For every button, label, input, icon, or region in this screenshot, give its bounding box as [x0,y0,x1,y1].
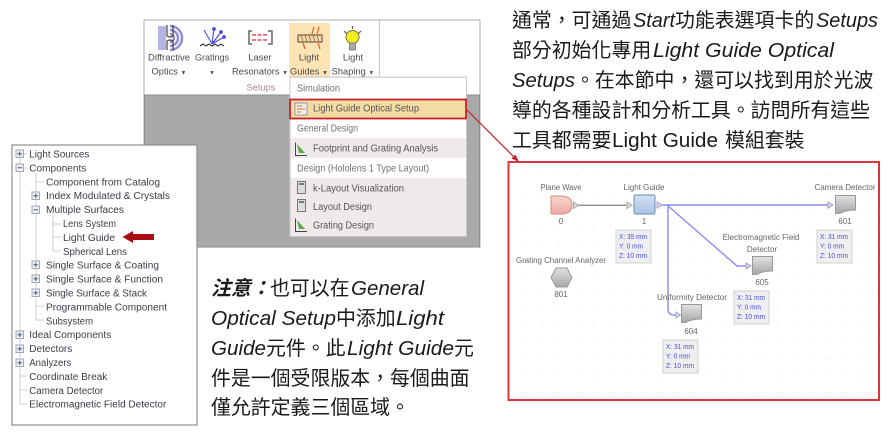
text block: note: 注意： [211,277,271,300]
node: grating channel analyzer: Grating Channel Analyzer [516,256,606,265]
text block: note: 僅允許定義三個區域。 [211,396,410,419]
node: light guide [616,183,665,263]
dropdown menu: General Design [297,124,358,134]
info box: X: 35 mm [619,234,647,241]
panel: component tree: Camera Detector [29,386,104,397]
panel: optical setup diagram [508,162,879,400]
ribbon button labels: Setups [247,82,276,92]
node: uniformity detector [657,293,727,373]
text block: intro paragraph: 通常，可通過 [512,9,631,32]
dropdown menu [290,77,466,236]
panel: component tree: Single Surface & Function [46,275,163,286]
dropdown menu: Design (Hololens 1 Type Layout) [297,164,429,174]
panel: component tree: Light Sources [29,150,89,160]
panel: component tree: Index Modulated & Crystals [46,191,170,202]
highlighted menu item [290,100,466,118]
text block: intro paragraph: 導的各種設計和分析工具。訪問所有這些 [512,99,870,122]
node: grating channel analyzer: 801 [554,290,568,299]
ribbon button labels: Diffractive [148,52,190,62]
panel: component tree: Single Surface & Stack [46,288,148,300]
node: light guide: 1 [642,217,647,226]
text block: intro paragraph: 功能表選項卡的 [675,9,814,32]
text block: intro paragraph: 工具都需要 [512,129,611,152]
panel: component tree: Single Surface & Coating [46,261,159,272]
text block: intro paragraph: Setups [512,70,575,92]
text block: note: Light Guide [347,338,454,360]
ribbon button labels: Gratings [195,52,229,62]
info box: Z: 10 mm [737,314,765,321]
panel: component tree: Spherical Lens [63,247,127,258]
ribbon button labels: Optics ▼ [152,66,186,76]
ribbon button labels: Guides ▼ [290,66,328,76]
node: plane wave [540,183,582,226]
info box: X: 31 mm [666,344,694,351]
icon: gratings [200,28,225,46]
arrow: points to Light Guide [122,231,154,243]
dropdown menu: k-Layout Visualization [313,184,404,194]
dropdown menu: Layout Design [313,202,372,213]
info box: X: 31 mm [737,295,765,302]
text block: intro paragraph: 部分初始化專用 [512,39,651,62]
info box [734,291,769,324]
text block: intro paragraph: 模組套裝 [725,129,805,152]
ribbon button labels: Laser [248,52,272,62]
node: uniformity detector: 604 [684,327,698,336]
text block: note: 也可以在 [270,277,350,300]
icon: light bulb [344,26,361,50]
dropdown menu: Footprint and Grating Analysis [313,144,438,154]
panel: component tree: Subsystem [46,316,93,327]
info box: Z: 10 mm [666,363,694,370]
icon: diffractive optics [158,25,182,50]
panel: component tree: Analyzers [29,358,71,369]
text block: note: Optical Setup [211,308,336,330]
panel: component tree: Electromagnetic Field Detector [29,400,167,411]
info box: Z: 10 mm [820,253,848,260]
text block: intro paragraph: Setups [816,10,878,32]
info box [817,230,852,263]
panel: component tree: Component from Catalog [46,177,160,188]
ribbon button labels: Resonators ▼ [232,66,288,76]
info box: Z: 10 mm [619,253,647,260]
text block: note: Light [396,308,446,330]
node: camera detector [814,183,876,263]
text block: note: Guide [211,338,266,360]
node: light guide: Light Guide [624,183,665,192]
node: electromagnetic field detector: Detector [747,245,777,254]
node: plane wave: 0 [559,217,564,226]
text block: note: General [351,278,425,300]
info box: Y: 0 mm [619,244,643,250]
text block: note: 元 [454,338,474,360]
tree expanders [16,150,40,366]
text block: note [211,277,474,419]
panel: component tree: Ideal Components [29,330,111,341]
text block: intro paragraph: Start [633,10,676,32]
info box: Y: 0 mm [737,304,761,312]
dropdown menu: Grating Design [313,220,374,232]
ribbon button labels: Shaping ▼ [332,66,374,76]
info box: Y: 0 mm [666,354,690,360]
panel: component tree: Coordinate Break [29,372,108,383]
info box: X: 31 mm [820,234,848,241]
panel: component tree: Detectors [29,344,72,355]
text block: intro paragraph: Light Guide [612,130,718,152]
ribbon button labels: ▼ [209,70,215,76]
node: grating channel analyzer [516,256,606,299]
ribbon button labels: Light [299,52,319,62]
node: camera detector: 601 [838,217,852,226]
panel: component tree: Lens System [63,219,116,230]
node: electromagnetic field detector: Electromagnetic Field [722,233,800,242]
node: electromagnetic field detector [722,233,800,324]
panel: component tree [12,145,197,425]
info box: Y: 0 mm [820,244,844,250]
ribbon button labels: Light [343,52,363,62]
panel: component tree: Multiple Surfaces [46,205,124,216]
info box [663,340,698,373]
text block: intro paragraph: Light Guide Optical [653,40,835,62]
panel: component tree: Light Guide [63,233,115,244]
text block: note: 元件。此 [266,337,346,360]
icon: light guide [298,27,322,49]
node: electromagnetic field detector: 605 [755,278,769,287]
node: camera detector: Camera Detector [814,183,876,192]
dropdown menu: Simulation [297,84,340,94]
node: uniformity detector: Uniformity Detector [657,293,727,302]
info box [616,230,651,263]
node: plane wave: Plane Wave [540,183,582,192]
text block: intro paragraph: 。在本節中，還可以找到用於光波 [575,69,873,92]
ribbon button labels [148,52,374,92]
dropdown menu: Light Guide Optical Setup [313,104,420,114]
connectors [574,202,833,318]
text block: intro paragraph [512,9,878,152]
text block: note: 中添加 [336,307,396,330]
text block: note: 件是一個受限版本，每個曲面 [211,367,470,390]
panel: component tree: Components [29,163,86,174]
icon: laser resonators [249,31,272,44]
arrow: menu item to optical setup [466,109,519,162]
panel: component tree: Programmable Component [46,302,167,313]
panel: ribbon toolbar screenshot [144,20,480,247]
